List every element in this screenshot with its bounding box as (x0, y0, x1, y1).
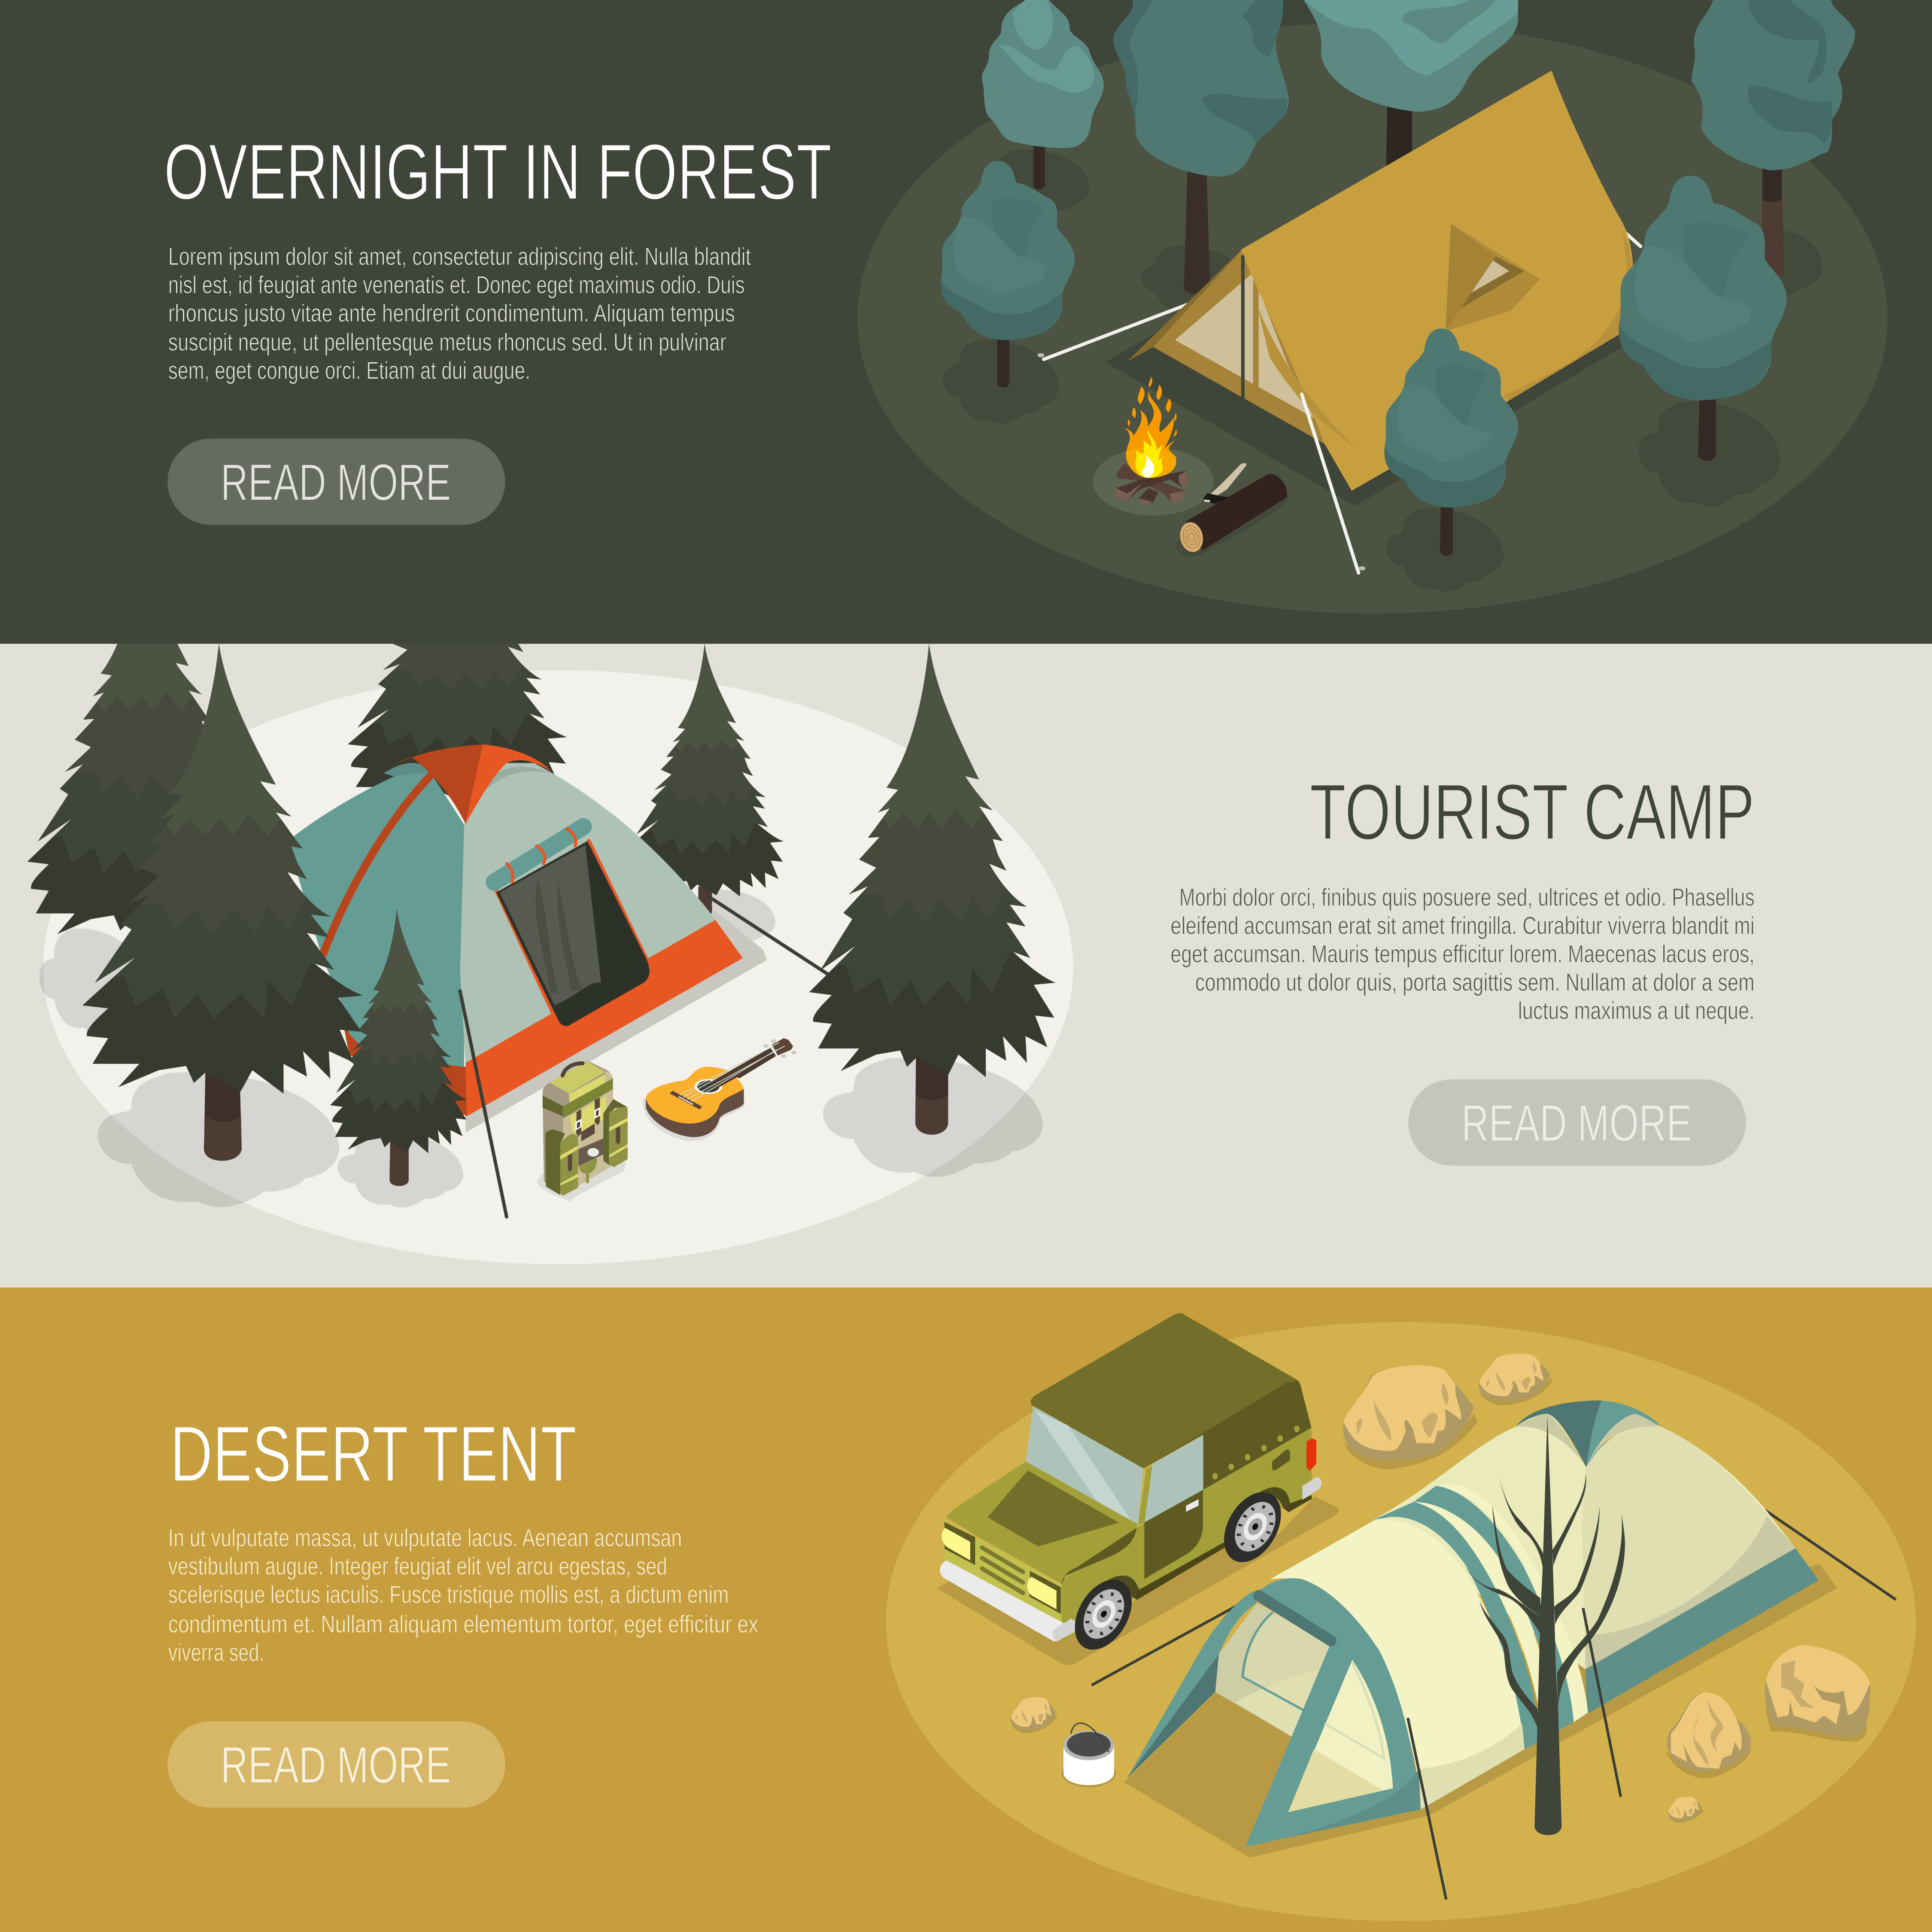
tent pole (1241, 257, 1245, 425)
text block: forest description: suscipit neque, ut pellentesque metus rhoncus sed. Ut in pulvinar (168, 328, 726, 356)
tunnel tent: rear dome (1374, 1400, 1819, 1714)
guy rope: rear right (1619, 227, 1640, 246)
pine: rear centre (328, 480, 578, 809)
tree: back right crown (1692, 0, 1855, 170)
tent door (494, 826, 650, 1026)
pine: front left (58, 644, 377, 1094)
pine trunk: rear right (698, 886, 712, 923)
text block: forest description: rhoncus justo vitae ante hendrerit condimentum. Aliquam tempus (168, 300, 735, 327)
text block: desert description: vestibulum augue. Integer feugiat elit vel arcu egestas, sed (168, 1553, 667, 1580)
text block: camp description: luctus maximus a ut neque. (1518, 997, 1755, 1024)
button: read more (167, 1721, 505, 1807)
button: read more (1408, 1079, 1746, 1166)
pine: front right (787, 644, 1068, 1077)
pine: rear left (6, 541, 273, 940)
forest illustration (941, 0, 1855, 592)
campfire (1093, 377, 1213, 516)
pine: rear right (616, 644, 791, 896)
tunnel tent: middle bands (1374, 1484, 1588, 1749)
panel: overnight in forest (167, 0, 1887, 614)
camp illustration (6, 480, 1068, 1217)
bucket (1061, 1723, 1116, 1787)
guitar (643, 1038, 796, 1141)
tree: front centre crown (1385, 328, 1518, 507)
forest clearing ellipse (857, 22, 1888, 614)
text block: camp description: eget accumsan. Mauris tempus efficitur lorem. Maecenas lacus eros, (1170, 940, 1755, 968)
tent: open side frame (1127, 250, 1331, 448)
tree: front left crown (941, 161, 1075, 340)
log and axe (1176, 463, 1289, 557)
text block: desert description: viverra sed. (168, 1639, 264, 1667)
tree trunks, front row (997, 337, 1716, 556)
desert clearing ellipse (886, 1322, 1916, 1921)
text block: camp description: commodo ut dolor quis, porta sagittis sem. Nullam at dolor a sem (1195, 969, 1755, 996)
panel: tourist camp (0, 480, 1932, 1288)
heading: desert tent: DESERT TENT (170, 1410, 577, 1498)
text block: desert description: In ut vulputate massa, ut vulputate lacus. Aenean accumsan (168, 1525, 682, 1552)
camp clearing ellipse (43, 670, 1073, 1264)
text block: desert description: scelerisque lectus iaculis. Fusce tristique mollis est, a dictum enim (168, 1581, 729, 1609)
dome tent (288, 744, 743, 1116)
text block: forest description (168, 243, 751, 384)
text block: desert description (168, 1525, 759, 1667)
pine trunks: front (204, 1054, 948, 1186)
jeep (937, 1313, 1339, 1665)
tree: back centre crown (1304, 0, 1518, 112)
tent: window (1446, 224, 1540, 331)
guy rope: front (1302, 394, 1358, 573)
tree: front right crown (1619, 176, 1787, 400)
tree: back left crown (982, 0, 1104, 148)
tunnel tent: front section (1127, 1520, 1525, 1847)
text block: camp description: eleifend accumsan erat sit amet fringilla. Curabitur viverra blandit mi (1170, 912, 1755, 939)
button: read more: READ MORE (1461, 1094, 1692, 1152)
pine: front small (318, 909, 474, 1153)
tent pegs (1037, 353, 1365, 571)
guy rope: front left (1091, 1604, 1239, 1685)
text block: camp description (1170, 884, 1755, 1024)
guy rope: rear right (1764, 1510, 1896, 1600)
text block: forest description: sem, eget congue orci. Etiam at dui augue. (168, 357, 530, 384)
tent shadow (1105, 283, 1639, 506)
rocks (1011, 1354, 1870, 1823)
tent pole: rear (1583, 1608, 1621, 1797)
tent shadow (465, 911, 767, 1133)
guy rope: left (1044, 302, 1194, 359)
tent pole: front (1408, 1718, 1446, 1899)
tent: fly sheet (1241, 71, 1634, 491)
backpack (537, 1060, 628, 1201)
button: read more: READ MORE (221, 1736, 451, 1794)
tent pole (460, 991, 507, 1217)
button: read more: READ MORE (221, 453, 451, 511)
tree shadows (943, 149, 1823, 592)
text block: camp description: Morbi dolor orci, finibus quis posuere sed, ultrices et odio. Phasellus (1179, 884, 1755, 911)
tree trunks, back row (1033, 103, 1784, 295)
text block: desert description: condimentum et. Nullam aliquam elementum tortor, eget efficitur ex (168, 1611, 759, 1638)
button: read more (167, 439, 505, 525)
guy rope: right (708, 896, 828, 975)
heading: tourist camp: TOURIST CAMP (1310, 768, 1755, 856)
heading: overnight in forest: OVERNIGHT IN FOREST (164, 128, 832, 216)
desert tent shadow (1124, 1564, 1837, 1858)
tree shadows (39, 890, 1043, 1207)
tree: back centre-left crown (1113, 0, 1289, 176)
bare tree (1465, 1416, 1625, 1835)
text block: forest description: Lorem ipsum dolor sit amet, consectetur adipiscing elit. Nulla blandit (168, 243, 751, 270)
panel: desert tent (0, 1288, 1932, 1932)
text block: forest description: nisl est, id feugiat ante venenatis et. Donec eget maximus odio. Duis (168, 271, 745, 299)
